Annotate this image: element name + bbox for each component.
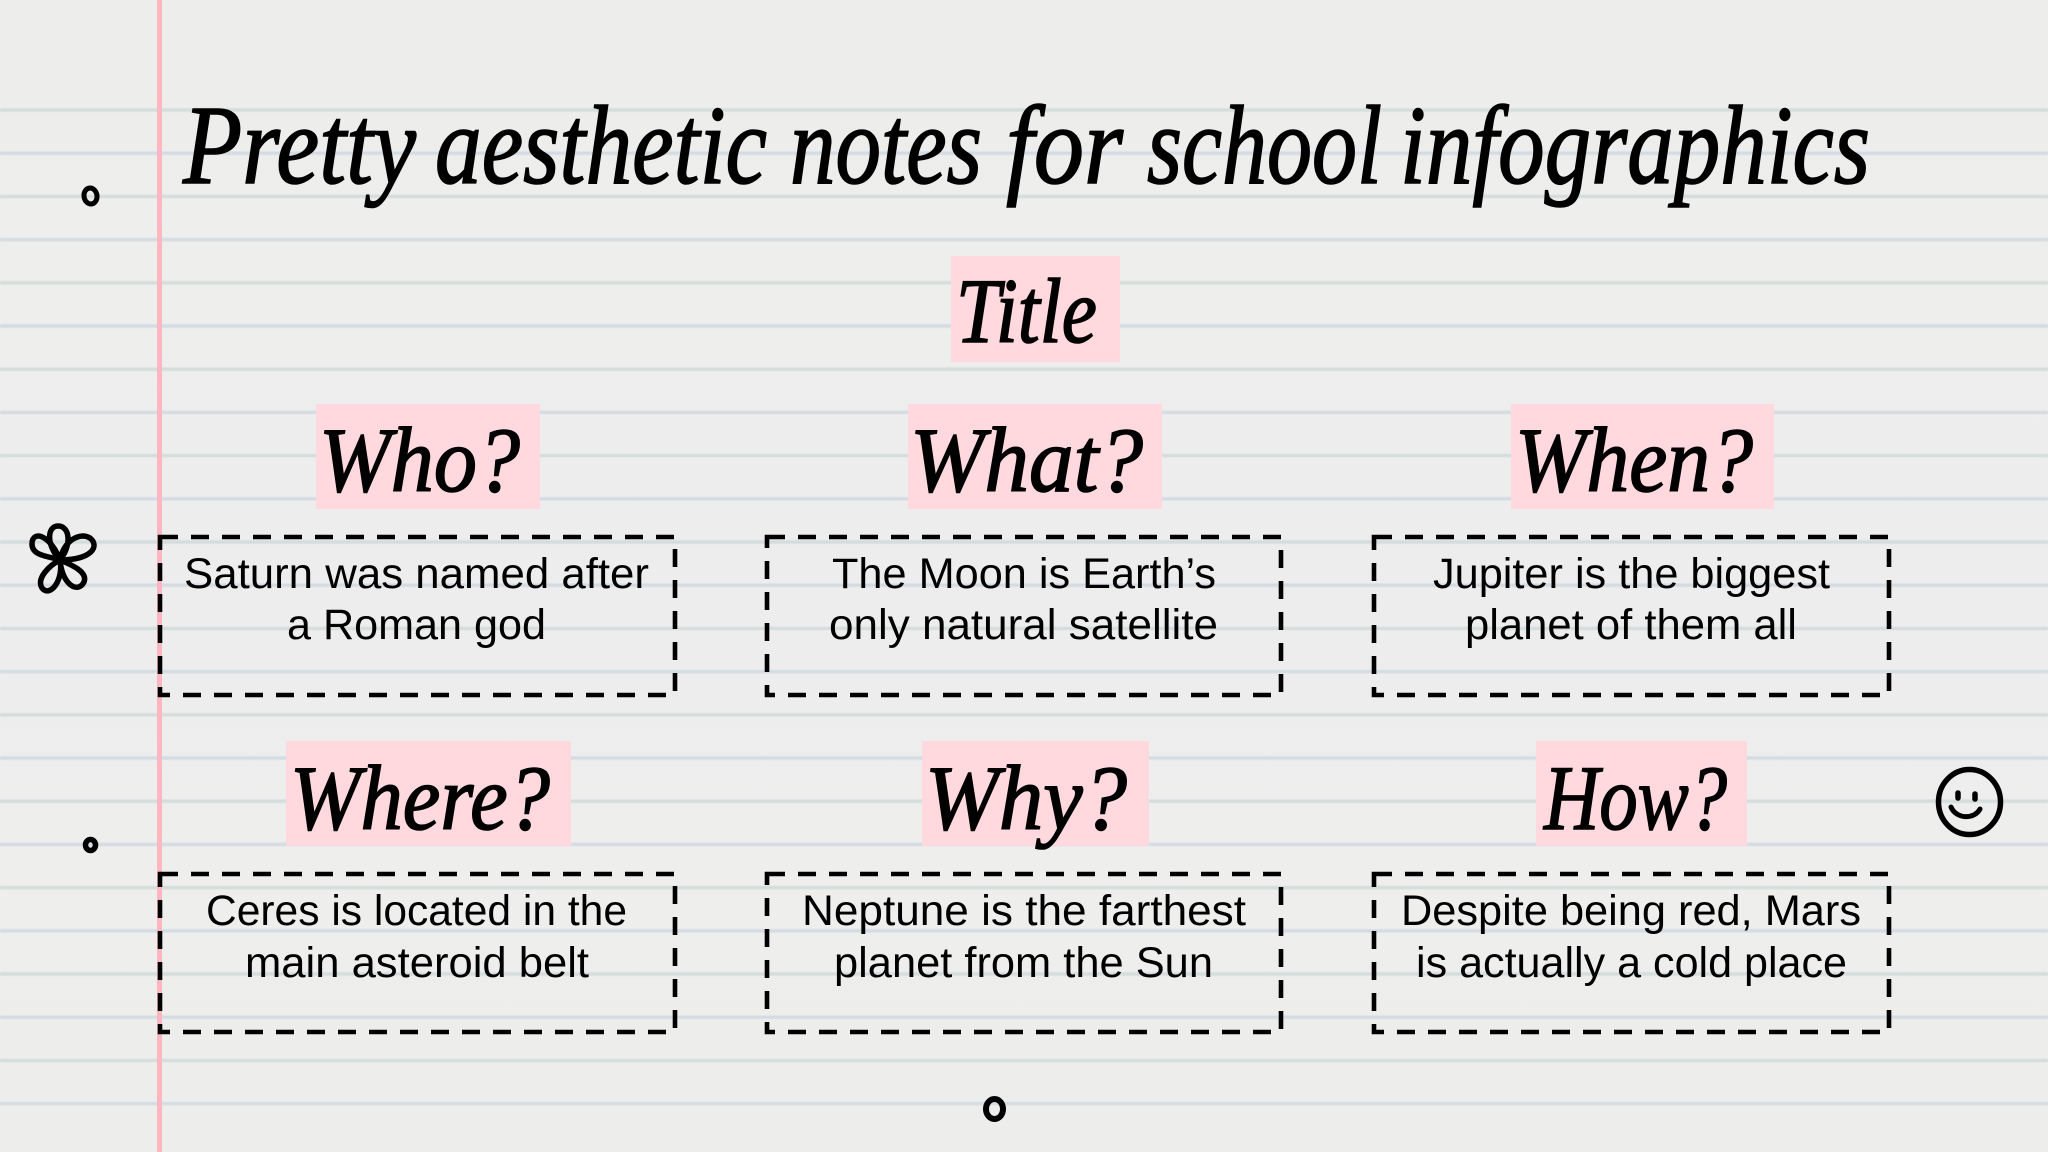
panel: where: [160, 741, 675, 1032]
text box: where: [160, 874, 675, 1032]
text box: where: main asteroid belt: [245, 939, 589, 987]
text box: why: Neptune is the farthest: [802, 887, 1246, 935]
icon: doodle circle top: [83, 187, 98, 205]
heading: what: What?: [910, 409, 1143, 511]
heading: why: Why?: [925, 747, 1127, 849]
main title: Pretty: [182, 84, 416, 208]
margin line: [157, 0, 162, 1152]
main title: infographics: [1400, 84, 1870, 208]
text box: where: Ceres is located in the: [206, 887, 627, 935]
main title: aesthetic: [435, 84, 767, 208]
main title: school: [1147, 84, 1382, 208]
panel: what: [767, 404, 1281, 695]
text box: what: [767, 537, 1281, 695]
icon: flower: [32, 526, 94, 591]
panel: who: [160, 404, 675, 695]
main title: for: [1006, 84, 1123, 208]
text box: how: Despite being red, Mars: [1401, 887, 1861, 935]
panel: why: [767, 741, 1281, 1032]
panel: how: [1374, 741, 1889, 1032]
panel: when: [1374, 404, 1889, 695]
icon: doodle circle middle: [86, 840, 96, 850]
text box: what: The Moon is Earth’s: [832, 550, 1216, 598]
text box: how: [1374, 874, 1889, 1032]
text box: who: [160, 537, 675, 695]
text box: when: Jupiter is the biggest: [1433, 550, 1830, 598]
text box: what: only natural satellite: [829, 601, 1218, 649]
text box: why: [767, 874, 1281, 1032]
main title: notes: [790, 84, 982, 208]
heading: who: Who?: [319, 409, 520, 511]
text box: when: [1374, 537, 1889, 695]
text box: who: a Roman god: [287, 601, 546, 649]
icon: smiley face: [1938, 770, 2000, 834]
section title label: Title: [956, 260, 1097, 362]
text box: when: planet of them all: [1465, 601, 1797, 649]
heading: where: Where?: [290, 747, 550, 849]
text box: why: planet from the Sun: [834, 939, 1213, 987]
text box: who: Saturn was named after: [184, 550, 649, 598]
heading: how: How?: [1543, 747, 1727, 849]
heading: when: When?: [1515, 409, 1753, 511]
text box: how: is actually a cold place: [1416, 939, 1847, 987]
icon: doodle circle bottom: [986, 1099, 1003, 1119]
